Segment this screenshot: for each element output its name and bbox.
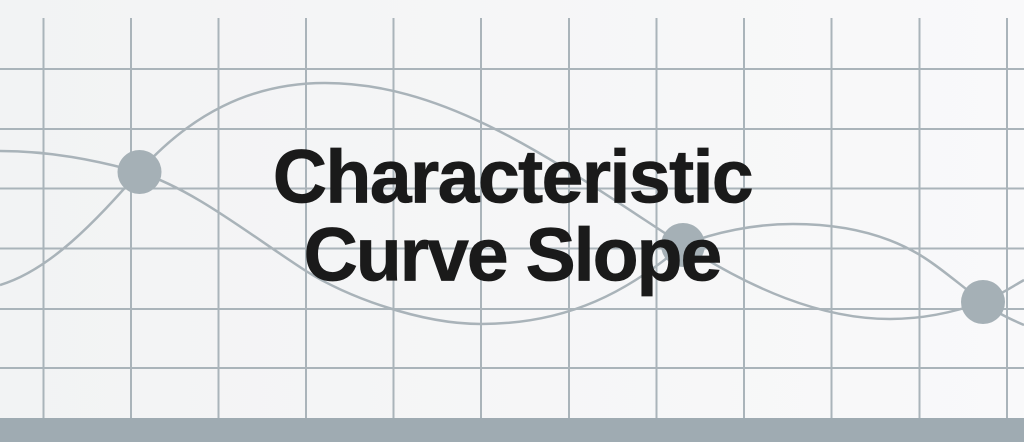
data point: left circle xyxy=(118,150,162,194)
data point: right circle xyxy=(961,280,1005,324)
title: Curve Slope xyxy=(304,212,721,296)
title: Characteristic xyxy=(273,134,752,218)
data point: centre circle xyxy=(661,223,705,267)
curve: first characteristic line xyxy=(0,83,1024,319)
footer bar xyxy=(0,418,1024,442)
curve: second characteristic line xyxy=(0,151,1024,325)
